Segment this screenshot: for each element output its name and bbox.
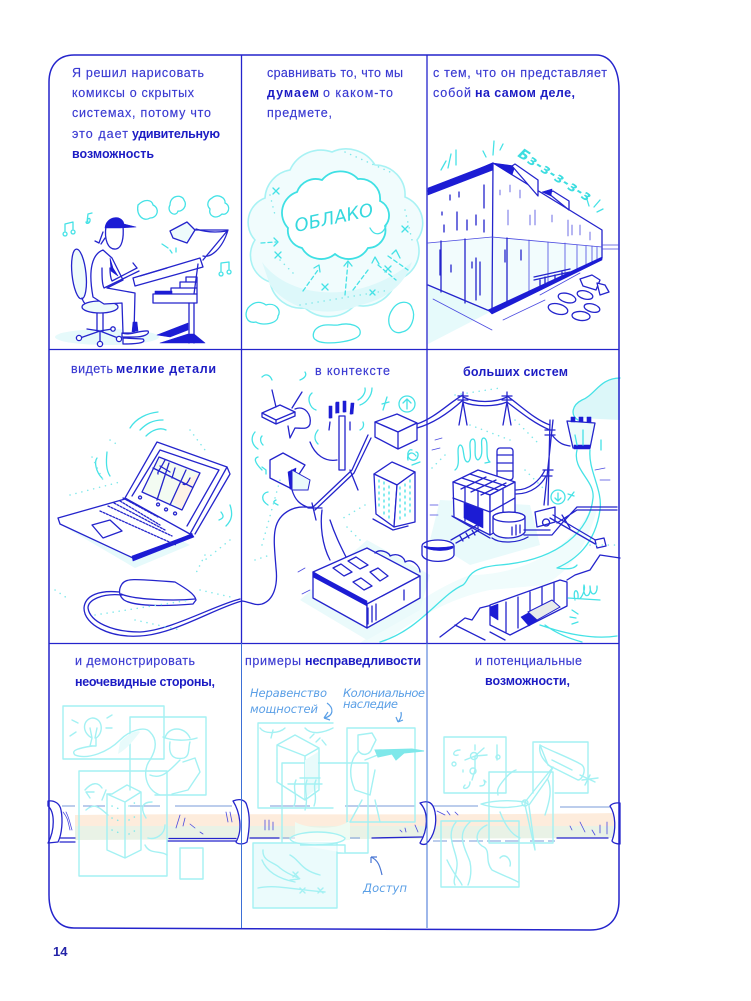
illustration: infrastructure network [252, 372, 620, 643]
caption: examples of injustice: несправедливости [305, 654, 421, 668]
caption: decision to draw comics: Я решил нарисовать [72, 66, 204, 80]
right pylon and transformer [516, 417, 606, 548]
caption: what it really is: собой [433, 86, 471, 100]
caption: potential opportunities [475, 654, 582, 688]
coil smoke [408, 438, 490, 470]
caption: potential opportunities: возможности, [485, 674, 570, 688]
dam and hills [440, 555, 620, 640]
stipple dots [255, 388, 615, 594]
comic frame with rounded corners [49, 55, 619, 930]
label: access: Доступ [362, 881, 407, 895]
caption: in context of big systems: в контексте [315, 364, 390, 378]
label: power inequality: мощностей [250, 702, 319, 716]
caption: compare with what we think: сравнивать то, что мы [267, 66, 403, 80]
illustration: person drawing at desk [55, 196, 231, 347]
illustration: data centre building [428, 141, 618, 344]
caption: decision to draw comics: это дает [72, 127, 128, 141]
cell tower [329, 388, 372, 470]
caption: in context of big systems: больших систем [463, 365, 568, 379]
label: colonial legacy: Колониальное [343, 686, 425, 700]
panel: potential opportunities [441, 654, 598, 887]
panel: examples of injustice [245, 654, 425, 908]
caption: compare with what we think [267, 66, 403, 120]
caption: examples of injustice [245, 654, 421, 668]
caption: demonstrate non-obvious sides [75, 654, 215, 689]
panel: what it really is — building [428, 66, 618, 344]
caption: decision to draw comics: комиксы о скрытых [72, 86, 195, 100]
illustration: overlapping cyan frames [63, 706, 206, 879]
label: ОБЛАКО: ОБЛАКО [293, 200, 375, 237]
caption: what it really is: на самом деле, [475, 86, 575, 100]
caption: what it really is [433, 66, 607, 100]
office building [373, 453, 420, 530]
caption: what it really is: с тем, что он представляет [433, 66, 607, 80]
caption: decision to draw comics [72, 66, 220, 161]
caption: decision to draw comics: удивительную [132, 127, 220, 141]
caption: compare with what we think: о каком-то [323, 86, 393, 100]
illustration: overlapping frames with soldier [253, 723, 424, 908]
illustration: frames with turbine [441, 737, 598, 887]
caption: decision to draw comics: системах, потому что [72, 106, 211, 120]
panel: non-obvious sides [63, 654, 215, 879]
panel: larger systems map [252, 364, 620, 643]
pipe joints [48, 800, 620, 844]
box with up arrow [375, 396, 417, 449]
page number: 14 [53, 944, 68, 959]
sound text: Бз-з-з: Бз-з-з-з-з [515, 146, 594, 205]
label: power inequality: Неравенство [250, 686, 327, 700]
label: colonial legacy [343, 686, 425, 722]
factory [422, 448, 617, 565]
caption: in context of big systems [315, 364, 568, 379]
server [255, 453, 310, 508]
caption: demonstrate non-obvious sides: и демонстрировать [75, 654, 195, 668]
label: colonial legacy: наследие [343, 697, 398, 711]
caption: compare with what we think: предмете, [267, 106, 332, 120]
caption: potential opportunities: и потенциальные [475, 654, 582, 668]
router [252, 372, 337, 460]
caption: see small details: видеть [71, 362, 113, 376]
caption: demonstrate non-obvious sides: неочевидные стороны, [75, 675, 215, 689]
substation block [300, 540, 430, 640]
illustration: laptop and power brick [55, 412, 312, 636]
caption: compare with what we think: думаем [267, 86, 319, 100]
caption: see small details: мелкие детали [116, 362, 216, 376]
label: power inequality [250, 686, 332, 720]
caption: decision to draw comics: возможность [72, 147, 154, 161]
pipeline band across bottom row [48, 800, 620, 844]
panel: artist at drafting table [55, 66, 231, 347]
panel: laptop [55, 362, 312, 636]
power lines to substation [308, 392, 550, 560]
label: access [362, 857, 407, 895]
river and smoke [360, 378, 620, 643]
panel: what we think — cloud [246, 66, 423, 343]
caption: examples of injustice: примеры [245, 654, 301, 668]
illustration: big thought cloud [246, 149, 423, 343]
caption: see small details [71, 362, 216, 376]
